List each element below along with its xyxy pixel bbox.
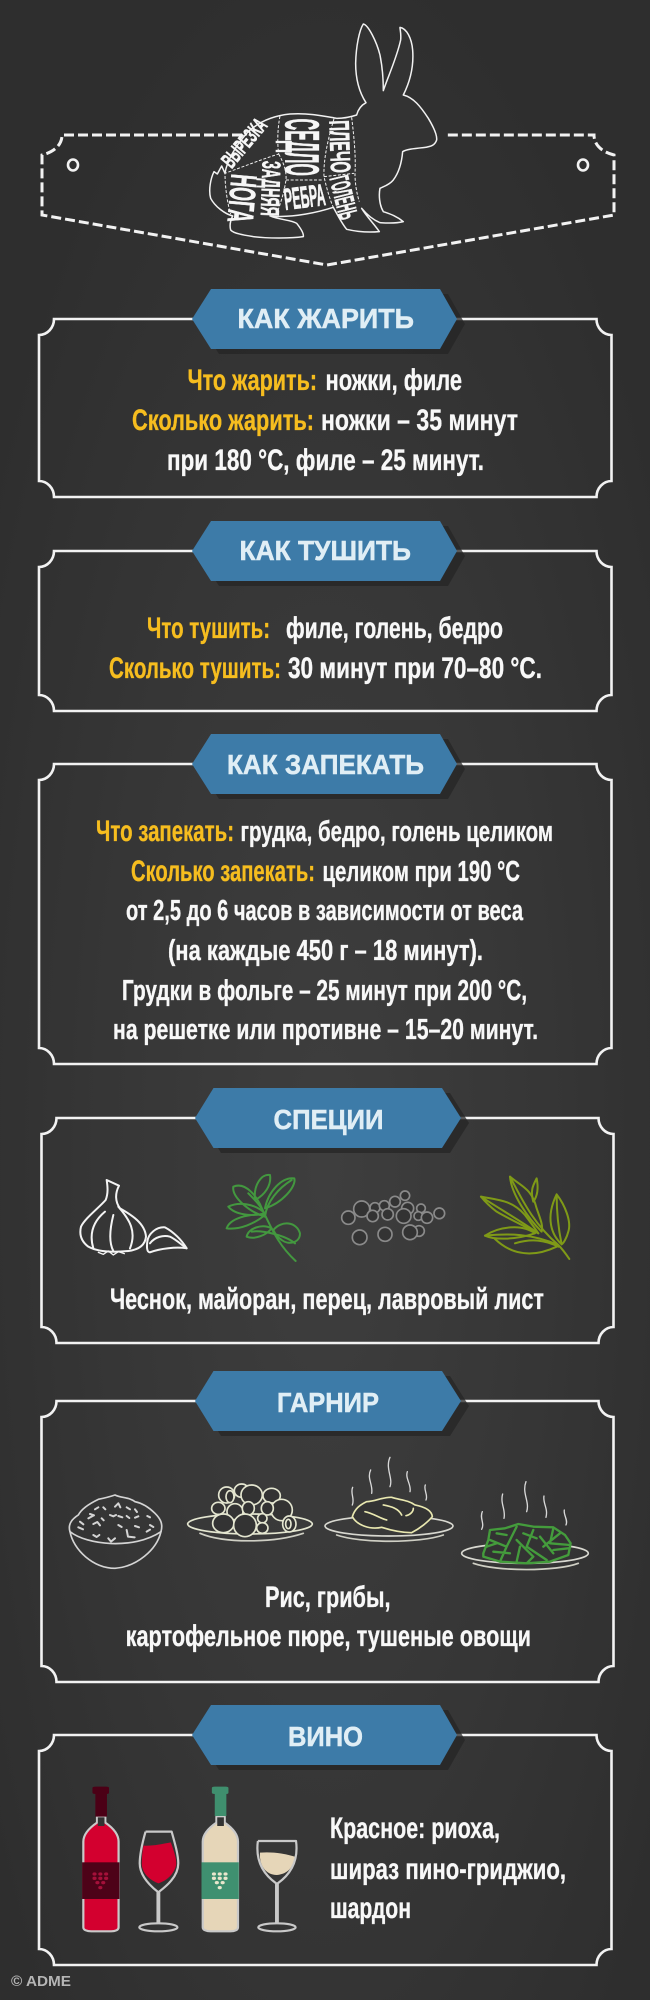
caption	[330, 1812, 566, 1925]
rabbit butcher diagram: СЕДЛО	[274, 119, 327, 176]
banner title: КАК ЖАРИТЬ	[238, 303, 414, 334]
text block: при 180 °С, филе – 25 минут.	[167, 444, 484, 477]
caption	[126, 1581, 531, 1653]
frame	[39, 764, 612, 1064]
rabbit butcher diagram: ПЛЕЧО	[323, 120, 356, 173]
caption: Красное: риоха,	[330, 1812, 500, 1845]
banner	[195, 1088, 461, 1148]
text block: филе, голень, бедро	[286, 612, 503, 645]
panel: how to stew	[39, 521, 612, 711]
text block: ножки, филе	[326, 364, 462, 397]
header: dashed ribbon with rabbit	[42, 24, 614, 265]
banner	[192, 734, 457, 794]
icon: pepper	[342, 1191, 445, 1245]
spice icons	[80, 1175, 569, 1261]
rabbit butcher diagram: ЗАДНЯЯ	[255, 160, 287, 216]
banner	[192, 521, 457, 581]
text block: Сколько жарить:	[132, 404, 314, 437]
frame	[39, 319, 612, 497]
copyright: © ADME	[11, 1973, 71, 1990]
banner shadow	[203, 1093, 469, 1153]
text block	[109, 612, 542, 685]
dashed ribbon	[42, 135, 614, 265]
panel: how to fry	[39, 289, 612, 497]
banner title: СПЕЦИИ	[274, 1104, 384, 1135]
text block	[96, 815, 553, 1046]
banner shadow	[203, 1376, 469, 1436]
caption: шираз пино-гриджио,	[330, 1853, 566, 1886]
icon: mushrooms plate	[188, 1484, 312, 1541]
rabbit butcher diagram: ВЫРЕЗКА	[216, 113, 272, 173]
icon: white wine glass	[257, 1841, 297, 1931]
banner title: ГАРНИР	[277, 1387, 379, 1418]
banner shadow	[200, 1710, 465, 1770]
frame	[39, 551, 612, 711]
icon: rice bowl	[69, 1495, 162, 1568]
wine icons	[82, 1787, 297, 1931]
icon: red wine glass	[139, 1832, 178, 1931]
text block: ножки – 35 минут	[321, 404, 518, 437]
rabbit butcher diagram: РЕБРА	[282, 178, 327, 217]
banner shadow	[200, 739, 465, 799]
banner title: ВИНО	[288, 1721, 363, 1752]
ribbon hole right	[578, 160, 588, 170]
text block	[132, 364, 518, 477]
icon: garlic	[80, 1180, 187, 1255]
rabbit butcher diagram: НОГА	[219, 173, 265, 224]
text block: Сколько запекать:	[131, 855, 315, 888]
icon: mashed potatoes plate	[325, 1457, 453, 1541]
rabbit butcher diagram	[210, 24, 437, 238]
panel: spices	[42, 1088, 614, 1343]
ribbon hole left	[68, 160, 78, 170]
frame	[39, 1735, 612, 1965]
caption: шардон	[330, 1892, 411, 1925]
frame	[42, 1401, 614, 1682]
text block: Что тушить:	[147, 612, 270, 645]
text block: Что жарить:	[188, 364, 317, 397]
icon: red wine bottle	[82, 1787, 119, 1931]
banner	[195, 1371, 461, 1431]
text block: Что запекать:	[96, 815, 234, 848]
panel: wine	[39, 1705, 612, 1965]
side dish icons	[69, 1457, 588, 1570]
text block: 30 минут при 70–80 °С.	[288, 652, 542, 685]
banner shadow	[200, 294, 465, 354]
icon: marjoram	[227, 1175, 300, 1261]
banner	[192, 1705, 457, 1765]
banner title: КАК ТУШИТЬ	[240, 535, 411, 566]
banner shadow	[200, 526, 465, 586]
banner title: КАК ЗАПЕКАТЬ	[227, 749, 424, 780]
rabbit butcher diagram: ГОЛЕНЬ	[323, 172, 364, 222]
icon: stewed vegetables plate	[462, 1482, 588, 1570]
caption: Рис, грибы,	[265, 1581, 390, 1614]
text block: целиком при 190 °С	[322, 856, 520, 888]
panel: how to bake	[39, 734, 612, 1064]
icon: white wine bottle	[201, 1787, 239, 1931]
icon: bay leaf	[481, 1177, 569, 1259]
banner	[192, 289, 457, 349]
text block: (на каждые 450 г – 18 минут).	[168, 935, 483, 967]
panel: side dishes	[42, 1371, 614, 1682]
text block: Сколько тушить:	[109, 652, 281, 685]
frame	[42, 1118, 614, 1343]
